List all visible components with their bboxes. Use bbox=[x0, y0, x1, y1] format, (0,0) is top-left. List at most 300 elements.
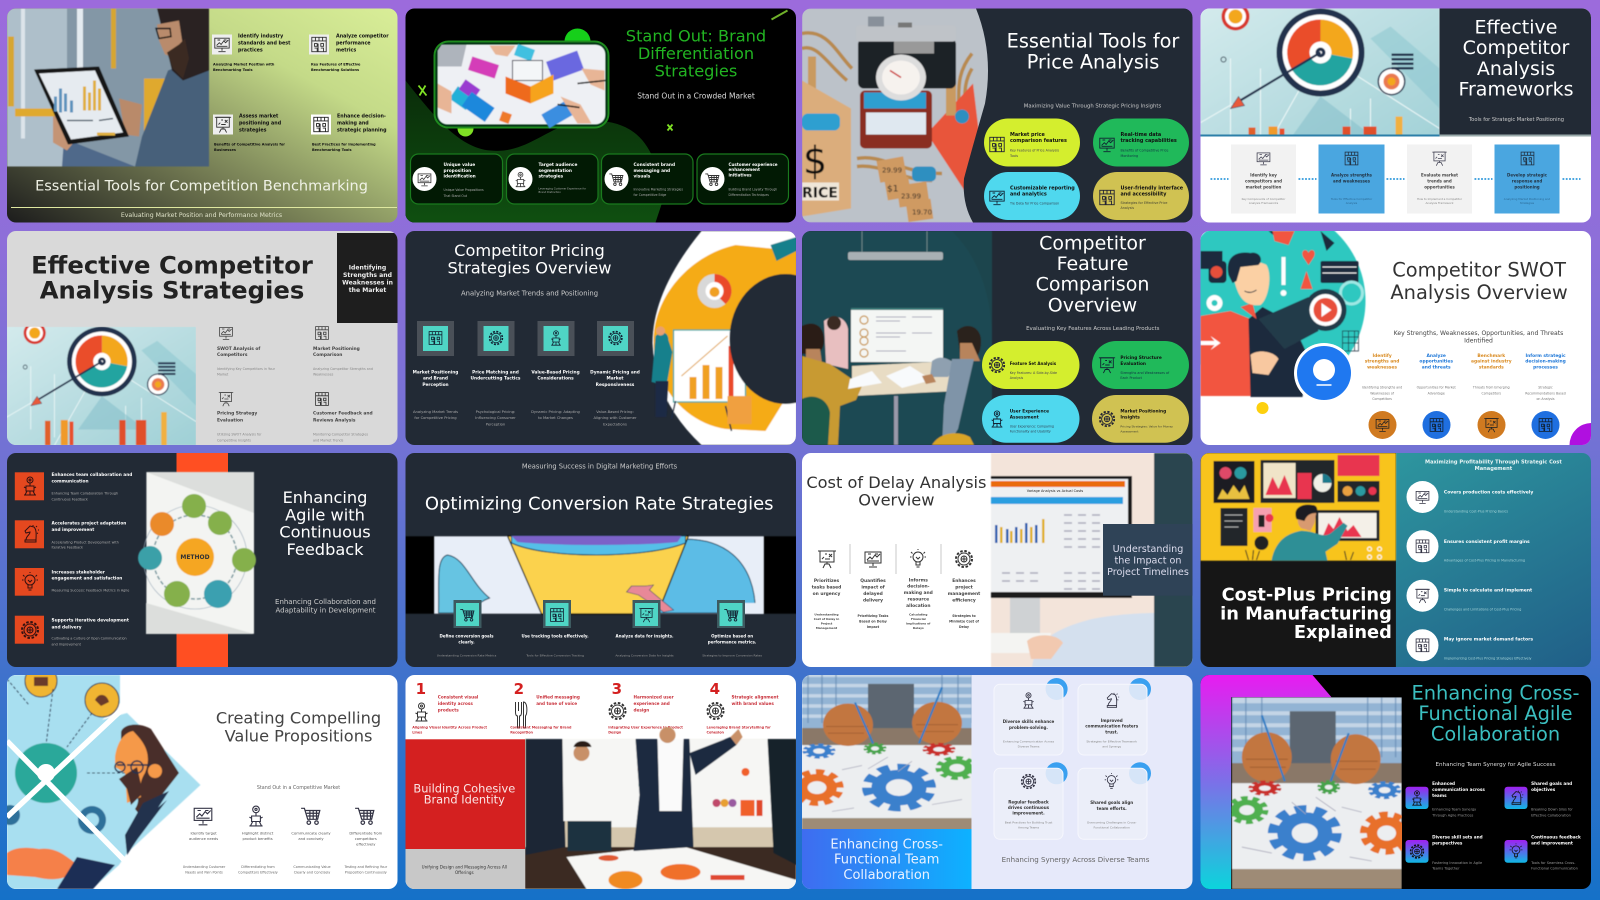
item: production costs bbox=[1406, 481, 1533, 513]
photo: hands drawing gears bbox=[794, 672, 976, 835]
card: unique value: identification bbox=[444, 174, 476, 180]
column: enhances: Enhances bbox=[952, 578, 976, 584]
column: quantifies: delayed bbox=[863, 591, 883, 597]
callout box bbox=[1103, 524, 1193, 596]
column: benchmark: Threats from Emerging bbox=[1472, 386, 1510, 390]
card: unique value: proposition bbox=[444, 168, 471, 174]
step: analyze: and weaknesses bbox=[1333, 178, 1371, 184]
item 4: strategic alignment: Leveraging Brand Storytelling for bbox=[706, 726, 771, 730]
title box: Functional Team bbox=[834, 853, 939, 868]
item: market positioning: Market Positioning bbox=[313, 346, 360, 352]
callout box: Project Timelines bbox=[1107, 567, 1189, 578]
list item: analyze metrics bbox=[309, 34, 389, 72]
card: regular feedback: improvement. bbox=[1012, 810, 1045, 815]
item 1: visual identity: products bbox=[438, 707, 459, 712]
step: price matching: Perception bbox=[486, 422, 506, 426]
item: SWOT analysis: Competitors bbox=[217, 352, 248, 358]
column: opportunities: Analyze bbox=[1427, 353, 1446, 359]
item 3: harmonized experience: Integrating User Experience in Product bbox=[608, 726, 683, 730]
step: market positioning: Perception bbox=[422, 382, 449, 388]
red title box: Building Cohesive bbox=[413, 781, 515, 795]
item: team collaboration: communication bbox=[52, 479, 89, 485]
step: market positioning bbox=[413, 321, 458, 420]
card: customer experience: Building Brand Loyalty Through bbox=[728, 188, 777, 192]
column: communicate: Communicate clearly bbox=[291, 831, 331, 835]
card: audience segmentation: Target audience bbox=[538, 162, 577, 168]
item: diverse skills: perspectives bbox=[1432, 840, 1463, 845]
list item: assess positioning: Benefits of Competitive Analysis for bbox=[214, 142, 285, 146]
pill: pricing structure: Strengths and Weaknesses of bbox=[1120, 371, 1170, 375]
item: diverse skills bbox=[1406, 834, 1483, 870]
card: audience segmentation: Brand Distinction bbox=[538, 190, 561, 194]
item: communication: communication across bbox=[1432, 787, 1485, 792]
item: calculate: Simple to calculate and implement bbox=[1444, 588, 1533, 594]
pill: market price: Key Features of Price Analysis bbox=[1010, 148, 1059, 152]
step: identify: Key Components of Competitor bbox=[1242, 197, 1286, 201]
panel: value propositions slide bbox=[0, 665, 398, 889]
step: analyze: Analyze strengths bbox=[1331, 172, 1373, 178]
column: informs: Calculating bbox=[909, 613, 927, 617]
card: unique value: That Stand Out bbox=[442, 194, 468, 198]
photo: monitor with spreadsheet bbox=[991, 453, 1193, 667]
column: prioritizes: tasks based bbox=[812, 584, 841, 590]
list item: analyze metrics: metrics bbox=[336, 48, 356, 54]
column: informs: resource bbox=[907, 596, 929, 602]
list item: identify standards bbox=[212, 34, 291, 72]
panel: effective competitor analysis slide bbox=[0, 231, 398, 445]
title: Optimizing Conversion Rate Strategies bbox=[425, 494, 774, 515]
callout box: the Market bbox=[349, 287, 386, 294]
column: identify needs: Needs and Pain Points bbox=[185, 870, 223, 874]
card: audience segmentation: segmentation bbox=[538, 168, 572, 174]
card: improved communication: communication fosters bbox=[1085, 724, 1139, 729]
item: team collaboration bbox=[15, 472, 132, 501]
card: regular feedback bbox=[994, 762, 1068, 839]
card: improved communication: Strategies for Effective Teamwork bbox=[1086, 740, 1137, 744]
list item: decision-making: strategic planning bbox=[337, 128, 387, 134]
column: differentiate: competitors bbox=[355, 837, 377, 841]
title: Stand Out: Brand bbox=[626, 26, 766, 46]
item: pricing strategy: Competitive Insights bbox=[217, 438, 251, 442]
column: opportunities: opportunities bbox=[1419, 359, 1453, 365]
step: market positioning: Analyzing Market Trends bbox=[413, 410, 458, 414]
photo: hands drawing gears bbox=[1228, 697, 1410, 889]
column: strengths bbox=[1362, 353, 1402, 439]
card: consistent messaging: for Competitive Edge bbox=[634, 193, 666, 197]
step: evaluate: Evaluate market bbox=[1421, 172, 1458, 178]
title: Essential Tools for bbox=[1007, 30, 1179, 52]
column: benchmark: against industry bbox=[1471, 359, 1512, 365]
column: decision-making: Recommendations Based bbox=[1525, 391, 1566, 395]
step: evaluate bbox=[1407, 144, 1472, 214]
panel: cost-plus pricing slide bbox=[1200, 453, 1592, 667]
callout box bbox=[337, 233, 398, 323]
pill: pricing structure: Pricing Structure bbox=[1120, 355, 1162, 361]
column: benchmark: Benchmark bbox=[1477, 353, 1505, 359]
step: develop: Develop strategic bbox=[1507, 172, 1548, 178]
grey subtitle box bbox=[406, 849, 525, 889]
panel: price analysis slide bbox=[802, 8, 1193, 222]
pill: feature set: Analysis bbox=[1010, 376, 1024, 380]
item: iterative development: and delivery bbox=[52, 624, 82, 630]
pill: feature set bbox=[982, 341, 1080, 389]
card: unique value: Unique value bbox=[444, 162, 475, 168]
card: improved communication: and Synergy bbox=[1102, 745, 1121, 749]
title box: Enhancing Cross- bbox=[830, 837, 943, 852]
column: prioritizes: Prioritizes bbox=[814, 578, 840, 584]
item: pricing strategy bbox=[217, 393, 262, 442]
subtitle: Stand Out in a Competitive Market bbox=[257, 785, 340, 791]
item 3: harmonized experience: Harmonized user bbox=[634, 695, 675, 700]
column: opportunities: Advantage bbox=[1428, 391, 1445, 395]
subtitle: Tools for Strategic Market Positioning bbox=[1468, 117, 1564, 123]
pill: real-time data: tracking capabilities bbox=[1120, 138, 1177, 144]
step: analyze data: Analyzing Conversion Data for Insights bbox=[615, 653, 674, 657]
column: strengths: weaknesses bbox=[1367, 364, 1397, 370]
image: branding design cards bbox=[434, 42, 608, 128]
step: analyze data bbox=[615, 600, 674, 657]
title: Analysis Overview bbox=[1390, 281, 1568, 304]
column: opportunities: and threats bbox=[1422, 364, 1451, 370]
list item: assess positioning: strategies bbox=[239, 128, 267, 134]
column: communicate: Communicating Value bbox=[293, 865, 331, 869]
photo: man holding tablet in factory bbox=[7, 8, 209, 166]
grey subtitle box: Offerings bbox=[455, 870, 474, 875]
column: decision-making bbox=[1525, 353, 1566, 439]
column: opportunities bbox=[1417, 353, 1457, 439]
title: Competitor bbox=[1039, 232, 1146, 254]
column: strengths: Weaknesses of bbox=[1370, 391, 1395, 395]
column: quantifies bbox=[858, 552, 889, 629]
panel: cohesive brand identity slide bbox=[406, 675, 796, 889]
column: benchmark bbox=[1471, 353, 1512, 439]
title: Feedback bbox=[286, 540, 364, 559]
panel: competition benchmarking slide bbox=[7, 8, 398, 222]
panel: conversion rate slide bbox=[406, 453, 796, 667]
item: communication bbox=[1406, 781, 1485, 817]
column: enhances: Minimize Cost of bbox=[949, 620, 980, 624]
card: customer experience: Differentiation Techniques bbox=[728, 193, 769, 197]
pill: real-time data: Monitoring bbox=[1120, 154, 1138, 158]
column: identify needs: Identify target bbox=[190, 831, 217, 835]
column: communicate bbox=[291, 808, 331, 874]
column: differentiate: Testing and Refining Your bbox=[344, 865, 388, 869]
item: profit margins: Ensures consistent profit margins bbox=[1444, 539, 1530, 545]
item: market positioning: Weaknesses bbox=[313, 373, 334, 377]
title: Agile with bbox=[285, 505, 365, 524]
callout box: Weaknesses in bbox=[342, 280, 393, 286]
step: analyze bbox=[1318, 144, 1384, 214]
label: chart title: Variage Analysis vs Actual Costs bbox=[1027, 489, 1083, 493]
column: opportunities: Opportunities for Market bbox=[1417, 386, 1457, 390]
column: prioritizes: Cost of Delay in bbox=[814, 617, 839, 621]
illustration: analyst and dashboards bbox=[1200, 453, 1396, 561]
item: iterative development: Cultivating a Culture of Open Communication bbox=[52, 637, 127, 641]
column: identify needs: audience needs bbox=[189, 837, 218, 841]
list item: analyze metrics: Analyze competitor bbox=[336, 34, 389, 40]
step: optimize bbox=[702, 600, 762, 657]
item: communication: Enhancing Team Synergy bbox=[1432, 807, 1476, 811]
item: project adaptation: Accelerating Product Development with bbox=[52, 540, 119, 544]
item: SWOT analysis: SWOT Analysis of bbox=[217, 346, 260, 352]
pill: reporting: Customizable reporting bbox=[1010, 186, 1075, 192]
card: shared goals bbox=[1078, 762, 1151, 839]
step: dynamic pricing: Value-Based Pricing: bbox=[596, 410, 634, 414]
column: informs: making and bbox=[904, 590, 933, 596]
item 3: harmonized experience: design bbox=[634, 707, 649, 712]
step: optimize: Optimize based on bbox=[711, 633, 753, 638]
step: develop bbox=[1494, 144, 1560, 214]
card: customer experience: enhancement bbox=[728, 167, 760, 172]
item: SWOT analysis bbox=[217, 327, 276, 377]
step: optimize: performance metrics. bbox=[708, 639, 757, 644]
step: dynamic pricing bbox=[590, 321, 640, 426]
step: evaluate: trends and bbox=[1427, 178, 1452, 184]
item: customer feedback: Monitoring Competitor Strategies bbox=[313, 433, 368, 437]
title: Effective Competitor bbox=[31, 250, 313, 279]
subtitle: Enhancing Team Synergy for Agile Success bbox=[1435, 762, 1556, 768]
column: informs: decision- bbox=[907, 584, 930, 590]
item: customer feedback: Customer Feedback and bbox=[313, 411, 373, 417]
subtitle: Identified bbox=[1464, 337, 1493, 344]
card: diverse skills: Enhancing Communication Across bbox=[1003, 740, 1054, 744]
column: highlight benefits: product benefits bbox=[242, 837, 273, 841]
card: shared goals: Functional Collaboration bbox=[1094, 826, 1130, 830]
pill: user experience bbox=[982, 395, 1080, 443]
step: price matching: Undercutting Tactics bbox=[471, 376, 521, 382]
step: define goals bbox=[437, 600, 497, 657]
list item: decision-making bbox=[311, 114, 387, 152]
column: prioritizes: on urgency bbox=[813, 591, 840, 597]
item: team collaboration: Enhancing Team Collaboration Through bbox=[52, 492, 118, 496]
pill: market positioning bbox=[1092, 395, 1189, 443]
pill: pricing structure: Evaluation bbox=[1120, 361, 1146, 367]
column: prioritizes: Understanding bbox=[814, 613, 839, 617]
card: diverse skills: Diverse Teams bbox=[1018, 745, 1040, 749]
photo: camera and price tags: 19.70 bbox=[912, 208, 932, 216]
item 1: visual identity: identity across bbox=[438, 701, 473, 706]
column: differentiate: Proposition Continuously bbox=[345, 870, 387, 874]
column: enhances bbox=[948, 551, 980, 629]
step: market positioning: for Competitive Pricing bbox=[414, 416, 457, 420]
step: develop: Analyzing Market Positioning and bbox=[1504, 197, 1550, 201]
column: strengths: Competitors bbox=[1372, 397, 1392, 401]
pill: user experience: User Experience: Comparing bbox=[1010, 424, 1054, 428]
pill: reporting: Tie Data for Price Comparison bbox=[1009, 202, 1059, 206]
card: regular feedback: drives continuous bbox=[1008, 805, 1050, 810]
pill: feature set: Key Features: A Side-by-Side bbox=[1010, 371, 1057, 375]
item: communication: Through Agile Practices bbox=[1431, 813, 1474, 817]
column: highlight benefits bbox=[238, 806, 278, 874]
pill: real-time data: Benefits of Competitive Price bbox=[1120, 148, 1168, 152]
panel: cross-functional team slide bbox=[794, 672, 1193, 889]
card: consistent messaging: visuals bbox=[634, 174, 651, 180]
card: improved communication: Improved bbox=[1101, 718, 1123, 723]
pill: market price: Market price bbox=[1010, 132, 1046, 138]
column: identify needs bbox=[183, 808, 226, 874]
item 1: visual identity bbox=[412, 680, 487, 735]
pill: market positioning: Market Positioning bbox=[1120, 409, 1166, 415]
pill: user experience: Functionality and Usability bbox=[1010, 430, 1051, 434]
item 4: strategic alignment: Cohesion bbox=[706, 731, 725, 735]
subtitle: Measuring Success in Digital Marketing Efforts bbox=[522, 463, 678, 471]
column: informs: Informs bbox=[909, 577, 928, 583]
step: price matching: Price Matching and bbox=[472, 369, 519, 375]
item 2: unified messaging: Recognition bbox=[510, 731, 534, 735]
column: enhances: Strategies to bbox=[952, 614, 977, 618]
step: value-based: Value-Based Pricing bbox=[531, 369, 580, 375]
column: enhances: project bbox=[955, 584, 973, 590]
column: informs bbox=[904, 549, 933, 630]
callout box: the Impact on bbox=[1115, 556, 1181, 567]
label: method: METHOD bbox=[180, 554, 210, 561]
subtitle: Management bbox=[1475, 466, 1513, 472]
list item: decision-making: making and bbox=[337, 120, 369, 126]
column: quantifies: Based on Delay bbox=[859, 620, 888, 624]
item: SWOT analysis: Market bbox=[217, 373, 229, 377]
pill: real-time data bbox=[1093, 118, 1189, 166]
item: shared goals: Shared goals and bbox=[1531, 781, 1572, 786]
step: develop: response and bbox=[1512, 178, 1542, 184]
list item: assess positioning: Businesses bbox=[214, 148, 236, 152]
item: market positioning bbox=[313, 327, 373, 377]
item 4: strategic alignment: 4 bbox=[710, 680, 720, 698]
step: value-based: Considerations bbox=[537, 376, 574, 382]
step: evaluate: How to Implement a Competitor bbox=[1417, 197, 1463, 201]
panel: SWOT overview slide bbox=[1176, 206, 1600, 467]
list item: assess positioning bbox=[213, 114, 285, 152]
title: Differentiation bbox=[638, 44, 754, 63]
column: communicate: Clearly and Concisely bbox=[294, 870, 330, 874]
list item: identify standards: Benchmarking Tools bbox=[213, 68, 253, 72]
column: decision-making: decision-making bbox=[1525, 359, 1566, 365]
item: calculate: Challenges and Limitations of Cost-Plus Pricing bbox=[1444, 607, 1521, 611]
photo: team reviewing branding boards bbox=[525, 727, 796, 889]
item 2: unified messaging: Unified messaging bbox=[536, 695, 580, 700]
column: decision-making: processes bbox=[1533, 364, 1558, 370]
column: quantifies: impact of bbox=[861, 584, 885, 590]
column: prioritizes: Management bbox=[816, 626, 838, 630]
title: Enhancing Cross- bbox=[1412, 681, 1579, 704]
title: Essential Tools for Competition Benchmarking bbox=[35, 178, 368, 194]
card: diverse skills bbox=[994, 678, 1068, 755]
list item: decision-making: Best Practices for Implementing bbox=[312, 142, 376, 146]
item: shared goals: Effective Collaboration bbox=[1531, 813, 1571, 817]
item 2: unified messaging: 2 bbox=[514, 680, 524, 698]
card: audience segmentation: strategies bbox=[538, 174, 564, 180]
step: identify bbox=[1231, 144, 1296, 214]
subtitle: Stand Out in a Crowded Market bbox=[637, 92, 755, 100]
step: analyze: Tools for Effective Competitor bbox=[1330, 197, 1373, 201]
card: diverse skills: problem-solving. bbox=[1009, 725, 1048, 730]
title: Feature bbox=[1057, 253, 1128, 275]
illustration: bearded man and network bbox=[0, 665, 200, 889]
pill: pricing structure: Each Product bbox=[1120, 376, 1143, 380]
item 1: visual identity: Lines bbox=[412, 731, 422, 735]
step: value-based: Dynamic Pricing: Adapting bbox=[531, 410, 580, 414]
title: Analysis bbox=[1477, 58, 1555, 80]
item 2: unified messaging: and tone of voice bbox=[536, 701, 577, 706]
column: prioritizes: Project bbox=[821, 622, 833, 626]
illustration: analyst with chart bbox=[652, 231, 842, 445]
step: analyze data: Analyze data for insights. bbox=[616, 633, 674, 638]
step: price matching bbox=[471, 321, 521, 426]
column: identify needs: Understanding Customer bbox=[183, 865, 226, 869]
column: quantifies: delivery bbox=[863, 598, 883, 604]
photo: camera and price tags: RICE bbox=[802, 186, 838, 202]
step: dynamic pricing: Expectations bbox=[603, 422, 627, 426]
item: calculate bbox=[1406, 580, 1533, 612]
pill: user-friendly: User-friendly interface bbox=[1120, 186, 1184, 192]
item 3: harmonized experience bbox=[608, 680, 683, 735]
card: customer experience: initiatives bbox=[728, 172, 752, 177]
item: shared goals bbox=[1504, 781, 1573, 817]
card: consistent messaging: Consistent brand bbox=[634, 162, 675, 168]
card: unique value bbox=[410, 154, 502, 204]
card: shared goals: team efforts. bbox=[1097, 806, 1127, 811]
card: improved communication bbox=[1078, 678, 1151, 755]
step: dynamic pricing: Dynamic Pricing and bbox=[590, 369, 640, 375]
item: communication: Enhanced bbox=[1432, 781, 1455, 786]
subtitle: Adaptability in Development bbox=[276, 607, 376, 615]
subtitle: Evaluating Market Position and Performance Metrics bbox=[121, 212, 282, 219]
item: stakeholder engagement: engagement and satisfaction bbox=[52, 576, 122, 582]
title: Collaboration bbox=[1431, 723, 1560, 746]
title: Continuous bbox=[279, 523, 371, 542]
column: informs: Financial bbox=[911, 617, 926, 621]
step: analyze: Analysis bbox=[1346, 201, 1358, 205]
step: evaluate: opportunities bbox=[1424, 184, 1455, 190]
illustration: funnel bbox=[406, 536, 796, 614]
title: Cost-Plus Pricing bbox=[1222, 585, 1392, 606]
step: identify: Identify key bbox=[1250, 172, 1277, 178]
item 4: strategic alignment: Strategic alignment bbox=[732, 695, 778, 700]
item: shared goals: objectives bbox=[1531, 787, 1556, 792]
item: iterative development bbox=[15, 616, 129, 646]
step: define goals: clearly. bbox=[458, 639, 475, 644]
step: develop: Strategies bbox=[1520, 201, 1535, 205]
step: identify: competitors and bbox=[1245, 178, 1282, 184]
step: tracking tools: Use tracking tools effectively. bbox=[522, 633, 589, 638]
item 1: visual identity: Aligning Visual Identity Across Product bbox=[412, 726, 487, 730]
column: decision-making: Strategic bbox=[1538, 386, 1553, 390]
pill: market price: Tools bbox=[1009, 154, 1018, 158]
item: project adaptation: Accelerates project adaptation bbox=[52, 521, 126, 527]
item: profit margins: Advantages of Cost-Plus Pricing in Manufacturing bbox=[1444, 559, 1525, 563]
list item: assess positioning: positioning and bbox=[239, 120, 282, 126]
subtitle: Evaluating Key Features Across Leading Products bbox=[1026, 326, 1160, 332]
photo: camera and price tags: $1 bbox=[887, 184, 898, 194]
title box: Collaboration bbox=[843, 868, 930, 883]
pill: feature set: Feature Set Analysis bbox=[1010, 361, 1057, 366]
step: value-based bbox=[531, 321, 580, 420]
column: enhances: management bbox=[948, 591, 980, 597]
pill: real-time data: Real-time data bbox=[1120, 132, 1161, 138]
step: dynamic pricing: Market bbox=[606, 376, 624, 382]
list item: analyze metrics: performance bbox=[336, 40, 371, 46]
step: dynamic pricing: Aligning with Customer bbox=[593, 416, 637, 420]
item: pricing strategy: Utilizing SWOT Analysis for bbox=[217, 433, 262, 437]
item: communication: teams bbox=[1432, 793, 1447, 798]
column: highlight benefits: Competitors Effectively bbox=[238, 870, 278, 874]
title: Functional Agile bbox=[1418, 702, 1573, 725]
item: iterative development: and Improvement bbox=[52, 642, 82, 646]
column: benchmark: Competitors bbox=[1482, 391, 1501, 395]
title: Overview bbox=[858, 490, 935, 509]
grey subtitle box: Unifying Design and Messaging Across All bbox=[422, 865, 507, 870]
step: price matching: Influencing Consumer bbox=[475, 416, 516, 420]
subtitle: Maximizing Value Through Strategic Pricing Insights bbox=[1024, 104, 1161, 110]
